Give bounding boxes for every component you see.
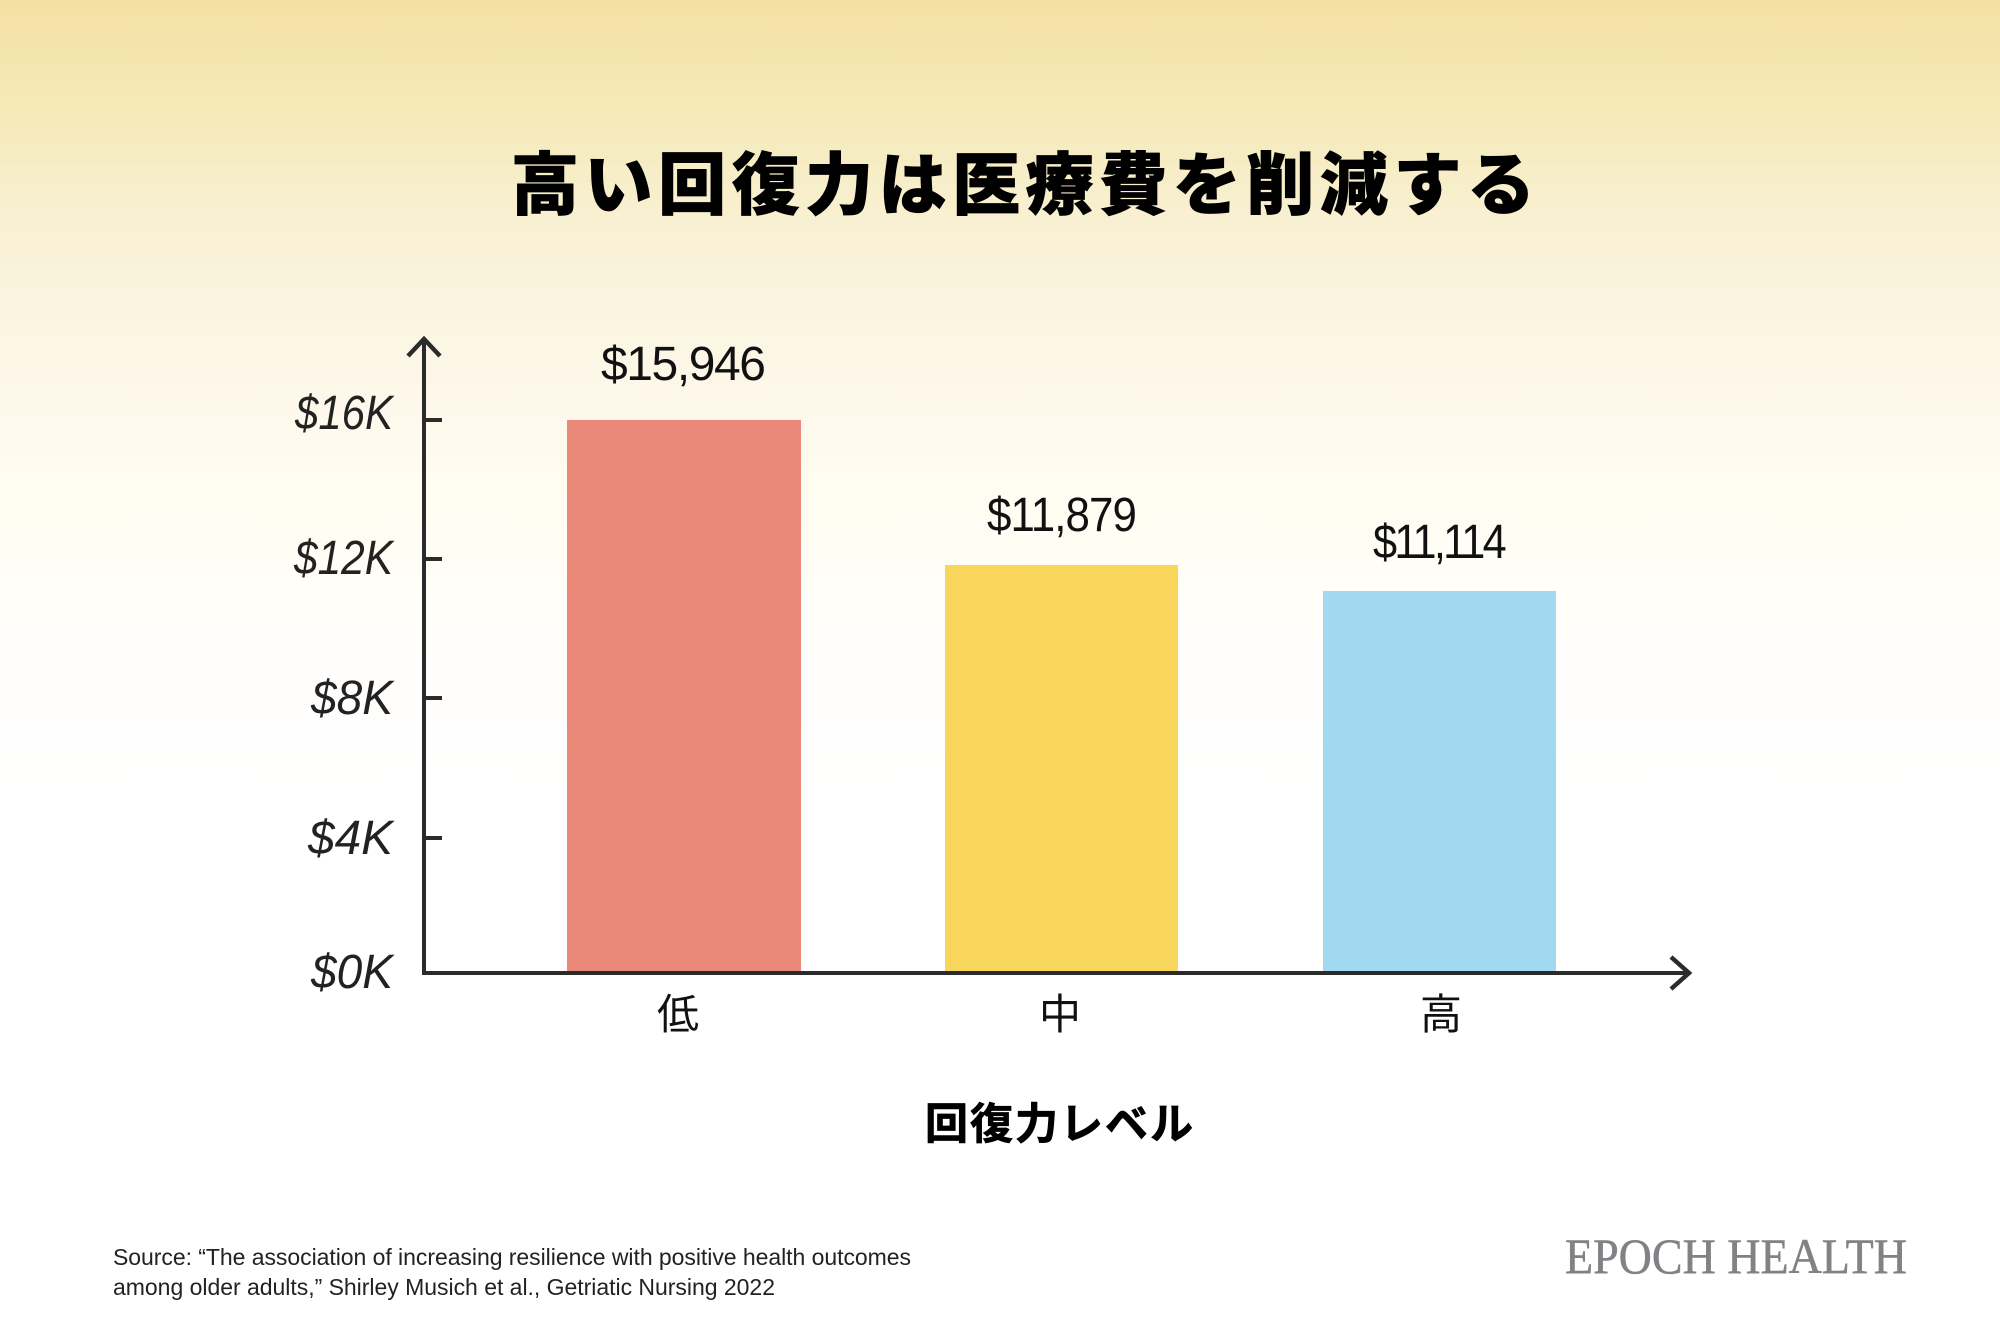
logo: Epoch Health: EPOCH HEALTH xyxy=(1565,1228,1907,1284)
category: high: 高 xyxy=(1420,991,1462,1038)
source note: among older adults,” Shirley Musich et al., Getriatic Nursing 2022 xyxy=(113,1274,775,1300)
bar: low xyxy=(567,420,801,973)
bar: medium xyxy=(945,565,1178,973)
label: $0K: $0K xyxy=(310,946,395,999)
value: $11,879: $11,879 xyxy=(987,489,1136,542)
value: $11,114: $11,114 xyxy=(1373,516,1506,569)
category: medium: 中 xyxy=(1039,991,1081,1038)
y axis with arrow and ticks xyxy=(408,339,442,975)
category labels xyxy=(657,991,1462,1038)
value: $15,946: $15,946 xyxy=(601,338,766,391)
bar: high xyxy=(1323,591,1556,973)
bar chart xyxy=(293,338,1689,1149)
x axis title: 回復力レベル xyxy=(925,1101,1193,1149)
source note: Source: “The association of increasing resilience with positive health outcomes xyxy=(113,1244,911,1270)
label: $8K: $8K xyxy=(310,672,395,725)
value labels xyxy=(601,338,1506,569)
category: low: 低 xyxy=(657,991,699,1038)
x axis with arrow xyxy=(422,957,1689,989)
title: 高い回復力は医療費を削減する xyxy=(511,148,1535,224)
y axis labels xyxy=(293,387,395,999)
source note xyxy=(113,1244,911,1300)
label: $16K: $16K xyxy=(294,387,395,440)
label: $12K: $12K xyxy=(293,532,395,585)
label: $4K: $4K xyxy=(307,812,395,865)
